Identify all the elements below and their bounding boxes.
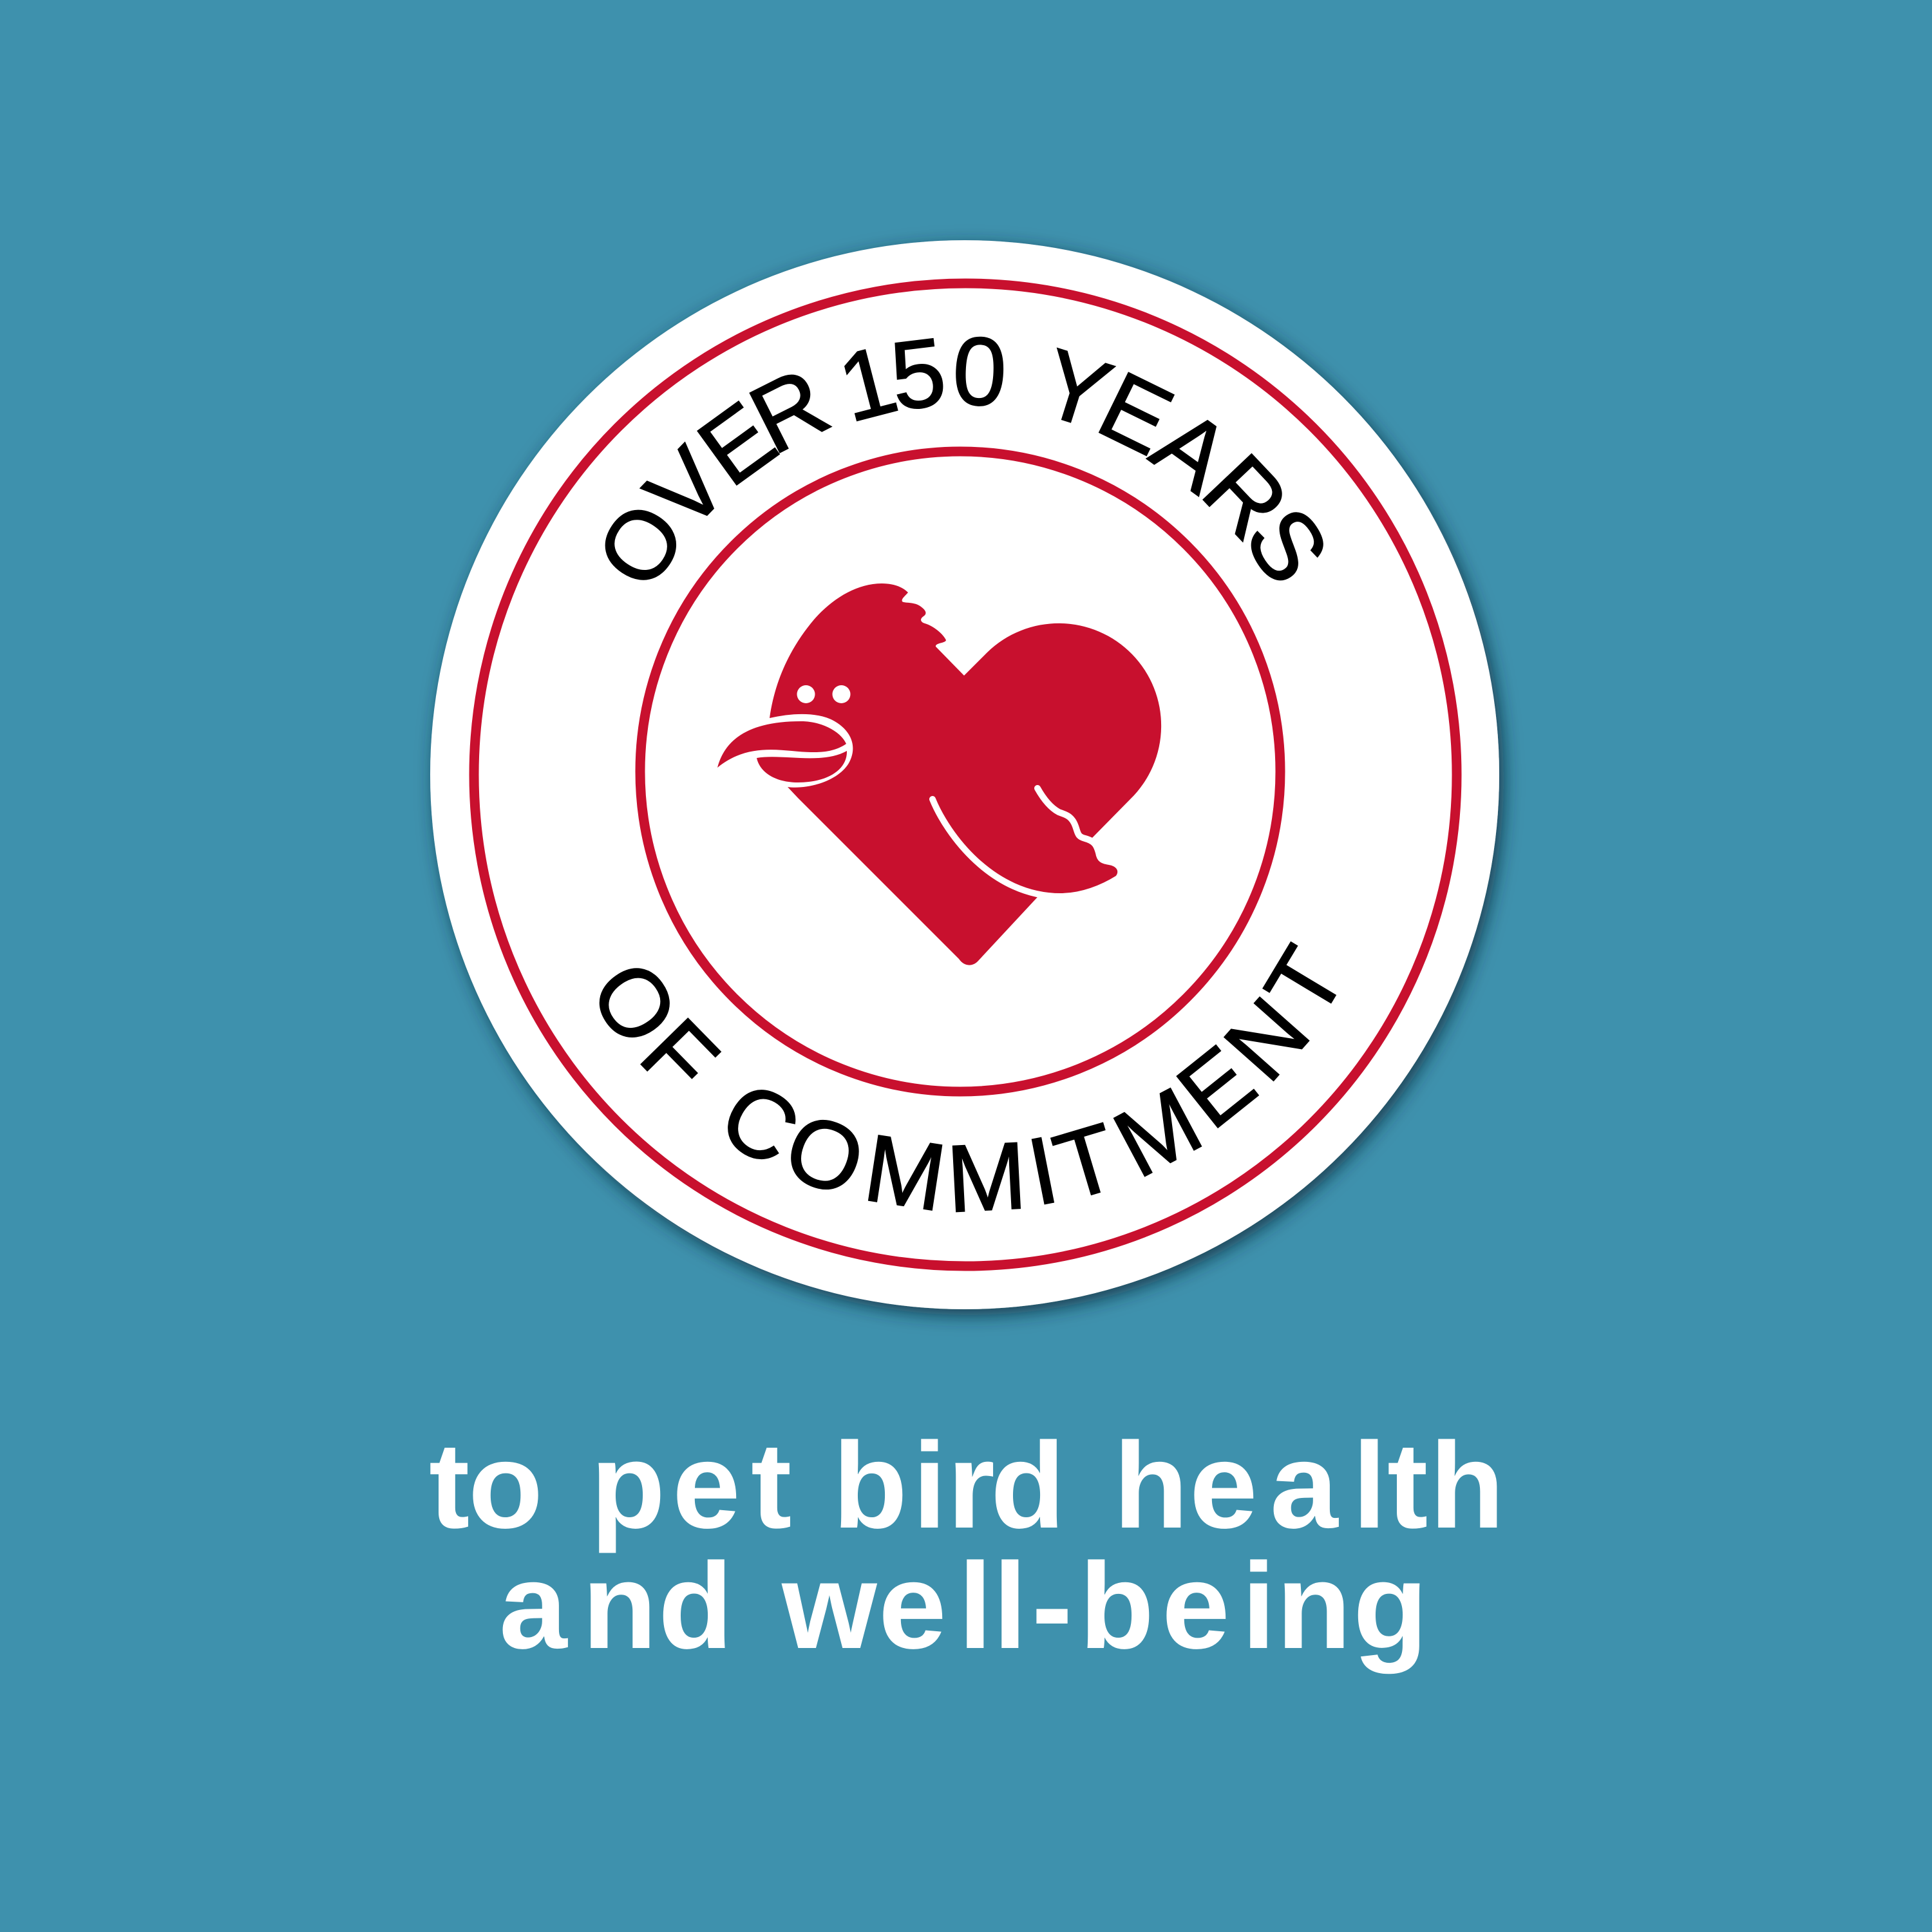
outer red ring (474, 283, 1457, 1266)
tagline (429, 1417, 1504, 1674)
curved heading: of commitment: OF COMMITMENT (569, 930, 1366, 1233)
wing (933, 788, 1121, 896)
badge white disc (430, 240, 1499, 1309)
tagline line 1: to pet bird health (429, 1417, 1504, 1554)
heart body with bird head (770, 583, 1161, 965)
lower beak (757, 751, 847, 782)
inner red ring (640, 451, 1280, 1092)
eye right (832, 685, 850, 703)
icon: bird heart (717, 583, 1161, 965)
upper beak (717, 721, 846, 768)
curved heading: over 150 years: OVER 150 YEARS (575, 316, 1350, 606)
eye left (797, 685, 815, 703)
tagline line 2: and well-being (499, 1538, 1428, 1674)
badge (430, 240, 1499, 1309)
